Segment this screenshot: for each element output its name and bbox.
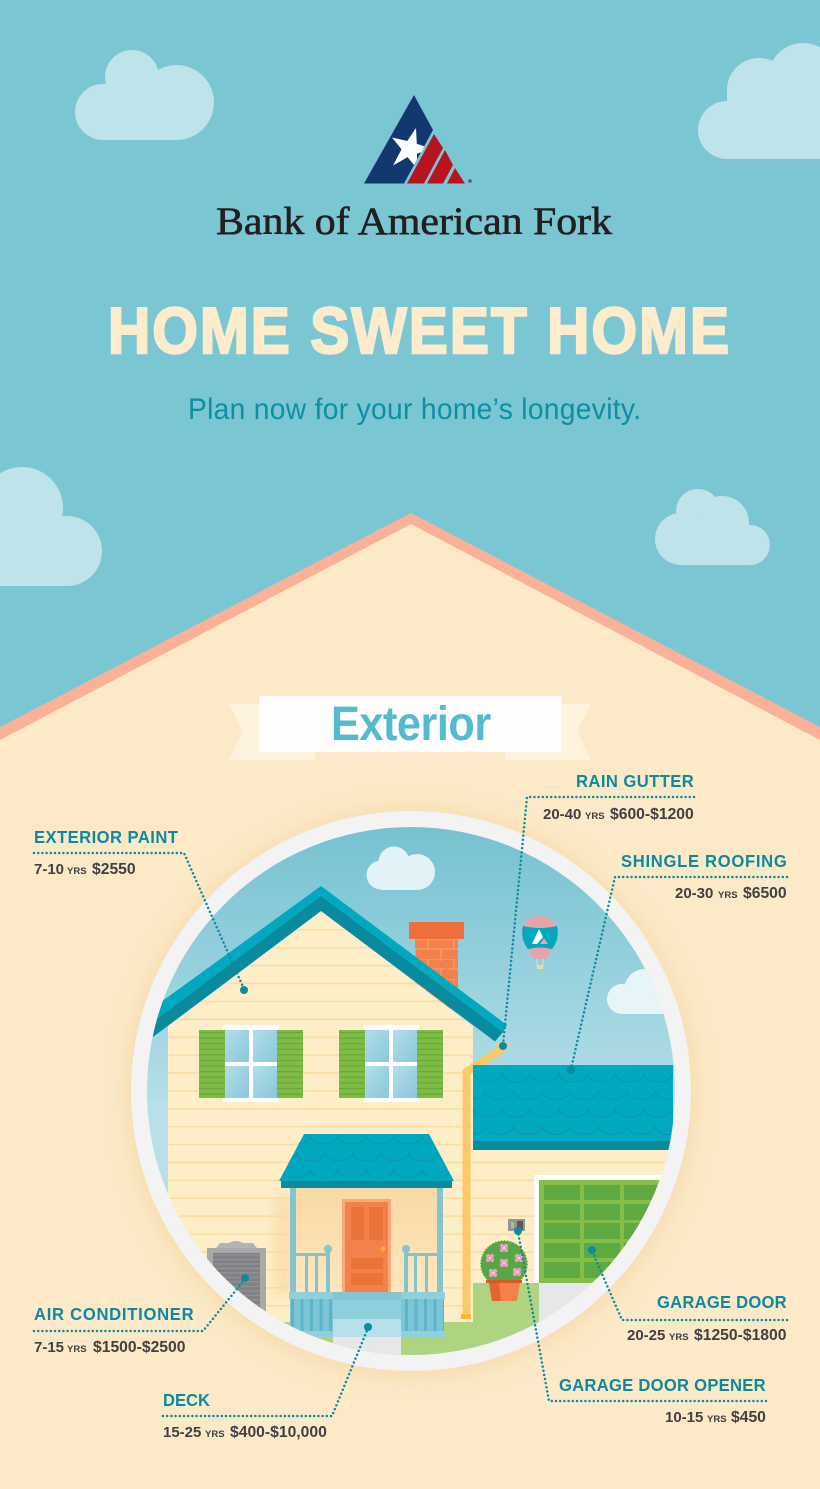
cap — [216, 1241, 257, 1248]
heading: AIR CONDITIONER — [34, 1305, 194, 1324]
gutter — [461, 1043, 511, 1319]
values: $2550 — [92, 861, 136, 878]
heading: GARAGE DOOR OPENER — [559, 1376, 766, 1395]
housing — [508, 1219, 525, 1231]
balloon basket — [537, 959, 543, 967]
callout: air conditioner — [34, 1274, 249, 1356]
posts — [290, 1188, 443, 1292]
values: YRS — [718, 890, 738, 901]
values: $400-$10,000 — [230, 1424, 327, 1441]
main roof dark band — [150, 896, 503, 1042]
values: $1500-$2500 — [93, 1339, 186, 1356]
logo red stripes — [407, 134, 465, 184]
porch roof scallops — [279, 1134, 454, 1181]
house illustration in circle — [140, 820, 684, 1363]
shutters — [199, 1030, 225, 1098]
values: YRS — [669, 1332, 689, 1343]
right window — [339, 1025, 443, 1102]
values: 7-10 — [34, 861, 64, 878]
balloon band — [522, 926, 558, 949]
values: YRS — [67, 1344, 87, 1355]
callout: deck — [163, 1323, 372, 1441]
values: $6500 — [743, 885, 787, 902]
ribbon tails — [229, 704, 591, 760]
downspout tip — [461, 1314, 471, 1319]
porch wall shade — [296, 1188, 437, 1292]
lower sky — [140, 1100, 673, 1360]
balloon logo — [532, 929, 548, 944]
porch roof — [279, 1134, 454, 1181]
title: HOME SWEET HOME — [108, 295, 729, 368]
callout: rain gutter — [499, 772, 694, 1050]
values: YRS — [67, 866, 87, 877]
circle frame — [131, 811, 691, 1371]
roof outline — [0, 513, 820, 1489]
frame — [223, 1025, 279, 1102]
values: YRS — [707, 1414, 727, 1425]
leader — [571, 877, 787, 1069]
downspout — [466, 1048, 503, 1316]
values: 7-15 — [34, 1339, 64, 1356]
subtitle: Plan now for your home’s longevity. — [188, 393, 641, 426]
values: $450 — [731, 1409, 766, 1426]
housing — [207, 1248, 266, 1318]
garage door — [534, 1175, 661, 1283]
leader — [503, 797, 694, 1045]
circle soft shadow — [127, 809, 695, 1377]
leader — [34, 1279, 245, 1331]
main roof light band — [150, 886, 507, 1032]
grill — [213, 1253, 260, 1313]
sky — [140, 820, 680, 1120]
door panels — [351, 1207, 383, 1285]
garage door opener box — [508, 1219, 525, 1231]
chimney body — [415, 939, 458, 1009]
balloon envelope — [522, 916, 558, 959]
potted bush — [481, 1241, 527, 1301]
driveway — [539, 1283, 592, 1322]
steps — [333, 1292, 401, 1300]
shutters — [339, 1030, 365, 1098]
values: YRS — [585, 811, 605, 822]
banner text: Exterior — [331, 697, 491, 751]
porch skirting — [290, 1299, 333, 1331]
air conditioner — [207, 1241, 266, 1318]
cloud middle right — [655, 489, 770, 565]
pot rim — [486, 1280, 522, 1283]
door panels — [544, 1185, 660, 1278]
callout: shingle roofing — [567, 852, 787, 1074]
leader — [518, 1232, 766, 1401]
panes — [365, 1030, 389, 1062]
cream wall — [0, 524, 820, 1489]
callout: garage door — [588, 1246, 787, 1344]
logo — [216, 95, 613, 243]
garage wing wall — [473, 1150, 683, 1325]
leader — [592, 1251, 787, 1320]
porch — [279, 1134, 454, 1357]
values: 20-30 — [675, 885, 713, 902]
door frame — [534, 1175, 661, 1283]
leader — [34, 853, 244, 989]
callout: garage door opener — [514, 1227, 766, 1426]
heading: RAIN GUTTER — [576, 772, 694, 791]
door frame — [342, 1199, 391, 1292]
values: 20-25 — [627, 1327, 665, 1344]
left window — [199, 1025, 303, 1102]
values: 15-25 — [163, 1424, 201, 1441]
balloon — [522, 916, 558, 969]
door — [345, 1202, 388, 1292]
switch — [517, 1221, 523, 1230]
heading: EXTERIOR PAINT — [34, 828, 178, 847]
cloud top left — [75, 50, 214, 140]
eave — [473, 1141, 673, 1150]
values: 10-15 — [665, 1409, 703, 1426]
cloud right — [607, 969, 664, 1014]
shingle roof — [473, 1065, 673, 1150]
house gable background — [0, 513, 820, 1489]
heading: SHINGLE ROOFING — [621, 852, 787, 871]
bank name: Bank of American Fork — [216, 200, 613, 243]
values: $1250-$1800 — [694, 1327, 787, 1344]
cloud middle left — [0, 467, 102, 586]
bracket — [495, 1043, 511, 1050]
pot — [489, 1283, 520, 1301]
logo star — [392, 128, 424, 166]
porch roof eave — [281, 1181, 452, 1188]
flowers — [486, 1244, 523, 1277]
banner — [229, 696, 591, 760]
leader — [163, 1328, 368, 1416]
cloud top right — [698, 43, 820, 159]
chimney cap — [409, 922, 464, 939]
logo triangle blue field — [364, 95, 433, 184]
lawn — [280, 1283, 539, 1360]
cloud in circle — [366, 846, 435, 890]
registered mark — [468, 179, 472, 183]
main house wall — [168, 911, 473, 1322]
heading: DECK — [163, 1391, 211, 1410]
door knob — [380, 1246, 386, 1252]
door — [539, 1180, 660, 1283]
values: 20-40 — [543, 806, 581, 823]
porch side shadow — [274, 1195, 292, 1295]
panes — [225, 1030, 249, 1062]
values: $600-$1200 — [610, 806, 694, 823]
deck bands — [289, 1292, 445, 1338]
frame — [363, 1025, 419, 1102]
callout: exterior paint — [34, 828, 248, 994]
heading: GARAGE DOOR — [657, 1293, 787, 1312]
railings — [296, 1245, 438, 1292]
banner panel — [259, 696, 562, 752]
bush — [481, 1241, 527, 1287]
scallops — [473, 1073, 673, 1135]
roof fill — [473, 1065, 673, 1141]
values: YRS — [205, 1429, 225, 1440]
